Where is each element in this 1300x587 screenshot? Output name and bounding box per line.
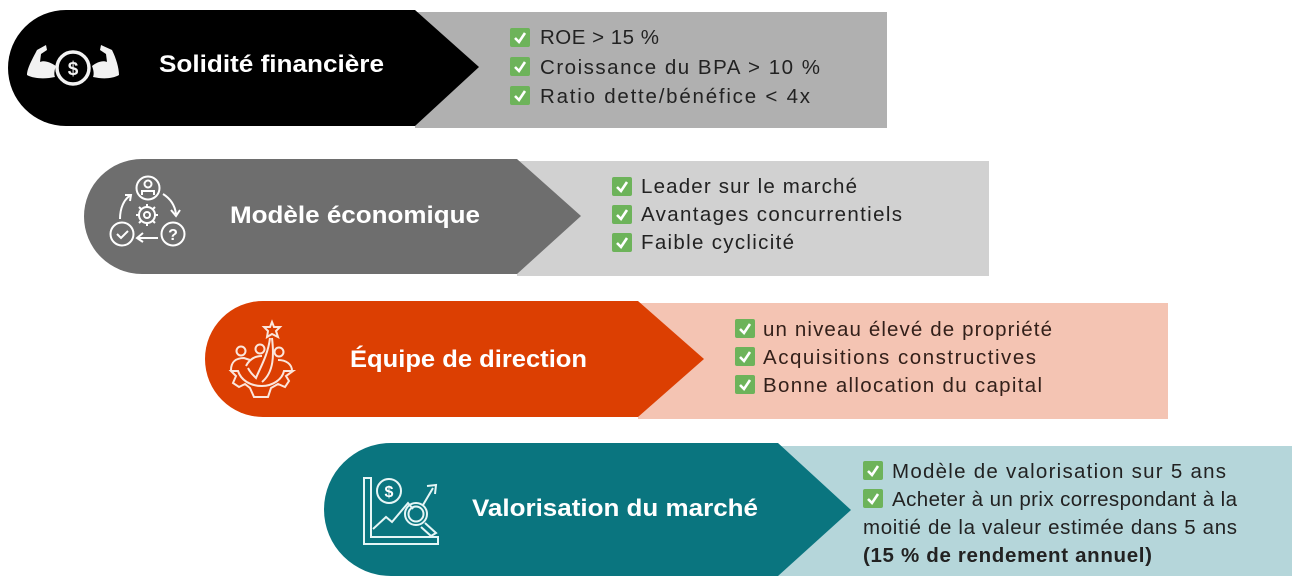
criteria list 4: (15 % de rendement annuel) xyxy=(863,544,1152,567)
icon: chart and magnifier xyxy=(364,478,438,544)
icon: chart and magnifier: $ xyxy=(385,484,394,501)
arrow banner 3 xyxy=(205,301,704,417)
criteria list 1: Ratio dette/bénéfice < 4x xyxy=(540,85,811,108)
row: Modèle économique xyxy=(84,159,989,276)
heading: Modèle économique: Modèle économique xyxy=(230,202,480,229)
criteria list 1: Croissance du BPA > 10 % xyxy=(540,56,820,79)
icon: business cycle: ? xyxy=(168,227,178,244)
panel: criteria background 1 xyxy=(415,12,887,128)
icon: arms and dollar coin xyxy=(27,45,119,84)
heading: Équipe de direction: Équipe de direction xyxy=(350,345,587,373)
criteria list 3: Acquisitions constructives xyxy=(763,346,1036,369)
row: Valorisation du marché xyxy=(324,443,1292,576)
criteria list 3: un niveau élevé de propriété xyxy=(763,318,1052,341)
criteria list 3 xyxy=(735,318,1052,397)
criteria list 2: Avantages concurrentiels xyxy=(641,203,902,226)
row: Solidité financière xyxy=(8,10,887,128)
heading: Solidité financière: Solidité financière xyxy=(159,51,384,78)
panel: criteria background 4 xyxy=(778,446,1292,576)
heading: Valorisation du marché: Valorisation du marché xyxy=(472,495,758,522)
panel: criteria background 2 xyxy=(517,161,989,276)
criteria list 3: Bonne allocation du capital xyxy=(763,374,1042,397)
criteria list 2: Faible cyclicité xyxy=(641,231,794,254)
panel: criteria background 3 xyxy=(638,303,1168,419)
criteria list 4: Modèle de valorisation sur 5 ans xyxy=(892,460,1226,483)
criteria list 1: ROE > 15 % xyxy=(540,26,659,49)
row: Équipe de direction xyxy=(205,301,1168,419)
icon: business cycle xyxy=(110,176,184,246)
criteria list 4 xyxy=(863,460,1238,567)
criteria list 2 xyxy=(612,175,902,254)
criteria list 2: Leader sur le marché xyxy=(641,175,857,198)
arrow banner 2 xyxy=(84,159,581,274)
icon: team and gear xyxy=(231,322,293,397)
criteria list 4: moitié de la valeur estimée dans 5 ans xyxy=(863,516,1237,539)
arrow banner 4 xyxy=(324,443,851,576)
criteria list 1 xyxy=(510,26,820,108)
criteria list 4: Acheter à un prix correspondant à la xyxy=(892,488,1238,511)
arrow banner 1 xyxy=(8,10,479,126)
icon: arms and dollar coin: $ xyxy=(68,59,79,80)
